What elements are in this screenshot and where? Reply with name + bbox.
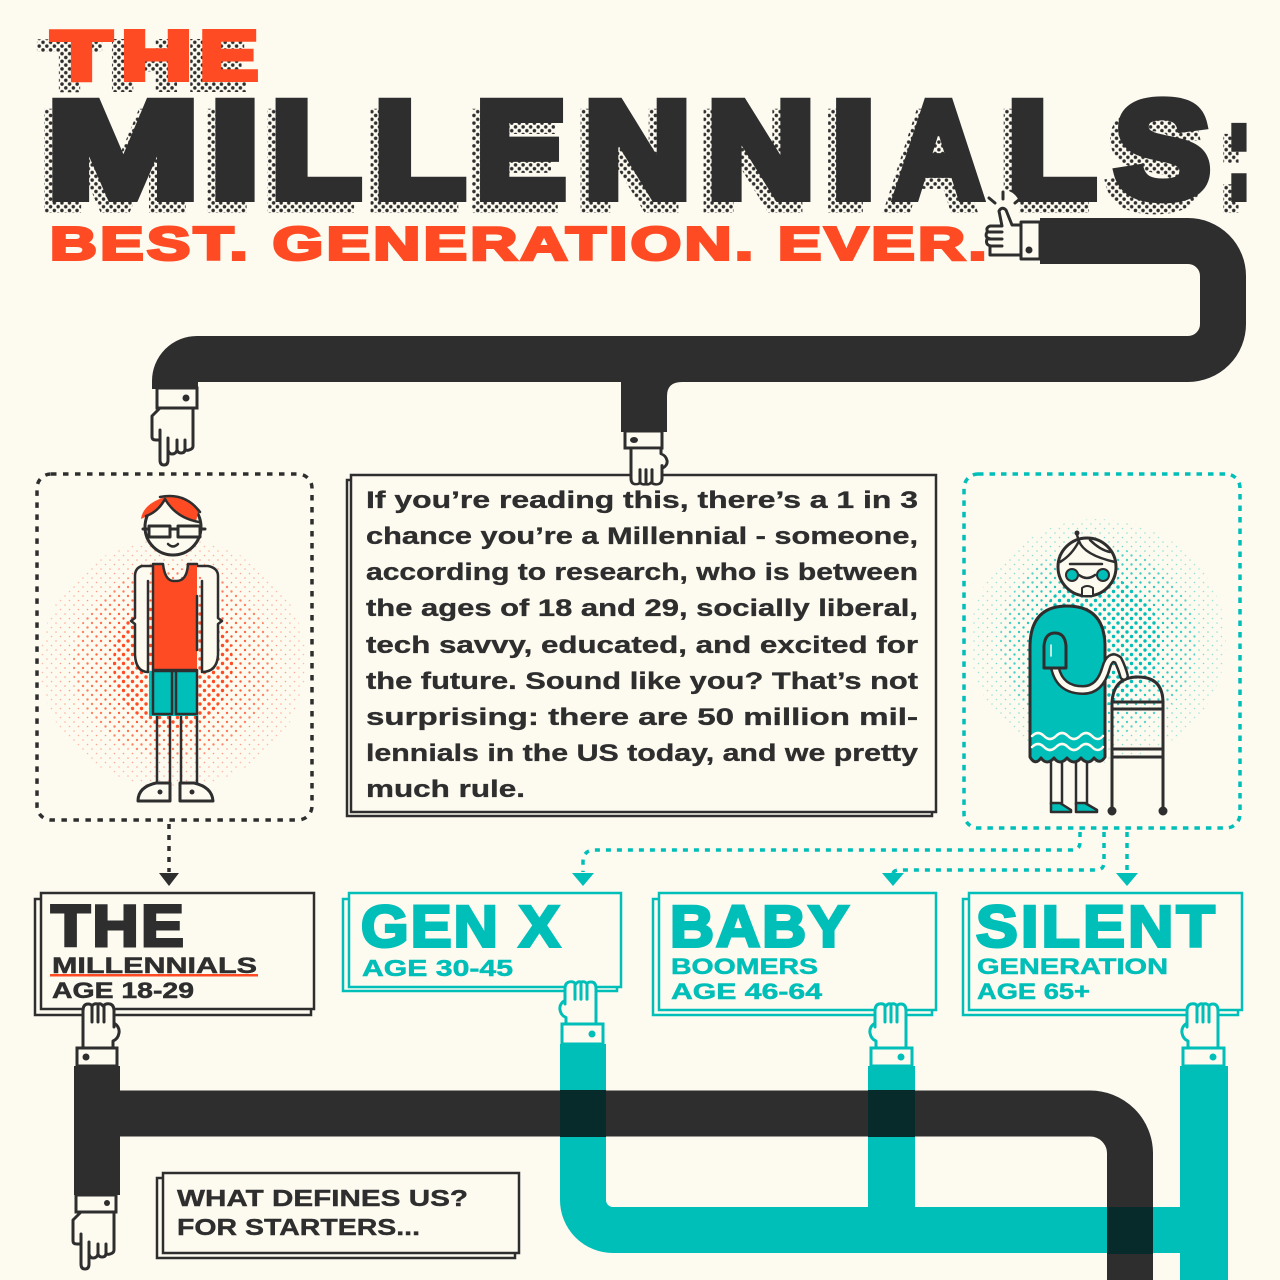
legs: [157, 715, 197, 783]
title word: MILLENNIALS: L: [1007, 73, 1096, 227]
title word: THE: E: [200, 17, 258, 95]
arm tube: [1055, 658, 1124, 690]
callout: what defines us: WHAT DEFINES US?: [177, 1185, 468, 1211]
intro text panel: [347, 475, 936, 816]
pointing hand to millennial: [152, 388, 197, 465]
label: Silent Generation: SILENT: [976, 894, 1218, 960]
title word: MILLENNIALS: I: [823, 84, 868, 238]
title word: MILLENNIALS: L: [271, 73, 361, 227]
title word: MILLENNIALS: M: [39, 84, 191, 238]
label: the millennials: AGE 18-29: [52, 978, 194, 1003]
head: [1058, 538, 1116, 596]
head: [145, 499, 201, 555]
hand holding Baby Boomers label: [870, 1004, 912, 1066]
callout: what defines us: [157, 1173, 519, 1258]
title word: MILLENNIALS: A: [894, 73, 983, 227]
dress: [1030, 606, 1105, 762]
subtitle: BEST. GENERATION. EVER.: [50, 218, 990, 270]
callout: what defines us: FOR STARTERS...: [177, 1214, 420, 1240]
title word: MILLENNIALS: L: [999, 84, 1088, 238]
label: Baby Boomers: AGE 46-64: [671, 979, 823, 1004]
title word: THE: H: [121, 17, 192, 95]
bottom teal arms: [583, 1044, 1228, 1280]
title word: MILLENNIALS: S: [1115, 73, 1210, 227]
arrow: to Silent Generation: [1116, 832, 1138, 886]
hand holding intro box, behind layer: [347, 431, 936, 816]
title word: THE: T: [39, 27, 100, 105]
figure: [131, 496, 222, 801]
panel: millennial character: [37, 474, 312, 820]
title word: MILLENNIALS: N: [699, 84, 807, 238]
title word: MILLENNIALS: I: [210, 73, 260, 227]
hand holding Gen X label: [560, 982, 603, 1044]
label: Baby Boomers: [653, 893, 936, 1015]
title word: MILLENNIALS: E: [476, 73, 566, 227]
shoes: [138, 783, 170, 801]
intro text panel: much rule.: [366, 776, 525, 803]
label: Silent Generation: GENERATION: [977, 954, 1168, 979]
title word: MILLENNIALS: I: [202, 84, 252, 238]
arms: [131, 566, 152, 672]
panel: silent generation character: [964, 474, 1240, 828]
sleeve: [1044, 633, 1066, 668]
intro text panel: tech savvy, educated, and excited for: [366, 632, 919, 659]
top arm: [175, 241, 1223, 432]
shorts: [149, 671, 198, 716]
label: Gen X: [343, 893, 621, 991]
walker: [1112, 677, 1163, 812]
title word: MILLENNIALS: I: [831, 73, 876, 227]
hand holding millennials label: [77, 1004, 119, 1066]
title word: MILLENNIALS: N: [584, 73, 691, 227]
title: [39, 17, 1251, 269]
label: the millennials: MILLENNIALS: [52, 953, 257, 978]
intro text panel: according to research, who is between: [366, 559, 918, 586]
title word: MILLENNIALS: A: [886, 84, 975, 238]
dashed teal frame: [964, 474, 1240, 828]
label: Silent Generation: AGE 65+: [977, 979, 1090, 1004]
title word: MILLENNIALS: N: [576, 84, 683, 238]
title word: MILLENNIALS: L: [263, 84, 353, 238]
legs: [1051, 763, 1087, 804]
figure: [1030, 530, 1166, 814]
intro text panel: surprising: there are 50 million mil-: [366, 704, 918, 731]
bottom dark arm: [74, 1066, 1153, 1280]
arrow: to Baby Boomers: [882, 832, 1104, 886]
title word: MILLENNIALS: L: [366, 84, 457, 238]
title word: MILLENNIALS: M: [47, 73, 199, 227]
title word: MILLENNIALS: N: [707, 73, 815, 227]
hand holding Silent Generation label: [1182, 1004, 1224, 1066]
intro text panel: the ages of 18 and 29, socially liberal,: [366, 595, 918, 622]
title word: THE: H: [109, 27, 180, 105]
title word: THE: [39, 17, 258, 105]
title word: THE: T: [51, 17, 112, 95]
halftone glow: [970, 519, 1226, 763]
middle fist and cuff: [625, 431, 667, 484]
intro text panel: If you’re reading this, there’s a 1 in 3: [366, 487, 918, 514]
label: the millennials: [35, 893, 314, 1015]
intro text panel: lennials in the US today, and we pretty: [366, 740, 918, 767]
title word: MILLENNIALS: S: [1107, 84, 1202, 238]
intro text panel: the future. Sound like you? That’s not: [366, 668, 918, 695]
title word: MILLENNIALS: [39, 73, 1251, 238]
arrow: millennial panel to label: [159, 824, 179, 886]
label: Silent Generation: [963, 893, 1242, 1015]
intro text panel: chance you’re a Millennial - someone,: [366, 523, 918, 550]
label: Baby Boomers: BABY: [670, 894, 851, 960]
thumbs up hand: [986, 190, 1040, 259]
halftone glow: [40, 538, 306, 788]
arrow: to Gen X: [572, 832, 1080, 886]
title word: THE: E: [188, 27, 246, 105]
label: Gen X: GEN X: [361, 894, 562, 960]
dashed frame: [37, 474, 312, 820]
title word: MILLENNIALS: L: [374, 73, 465, 227]
tank top: [153, 564, 197, 670]
label: Baby Boomers: BOOMERS: [671, 954, 818, 979]
label: the millennials: THE: [51, 894, 186, 959]
pointing hand at bottom: [73, 1195, 116, 1269]
label: Gen X: AGE 30-45: [362, 955, 513, 981]
title word: MILLENNIALS: E: [468, 84, 558, 238]
